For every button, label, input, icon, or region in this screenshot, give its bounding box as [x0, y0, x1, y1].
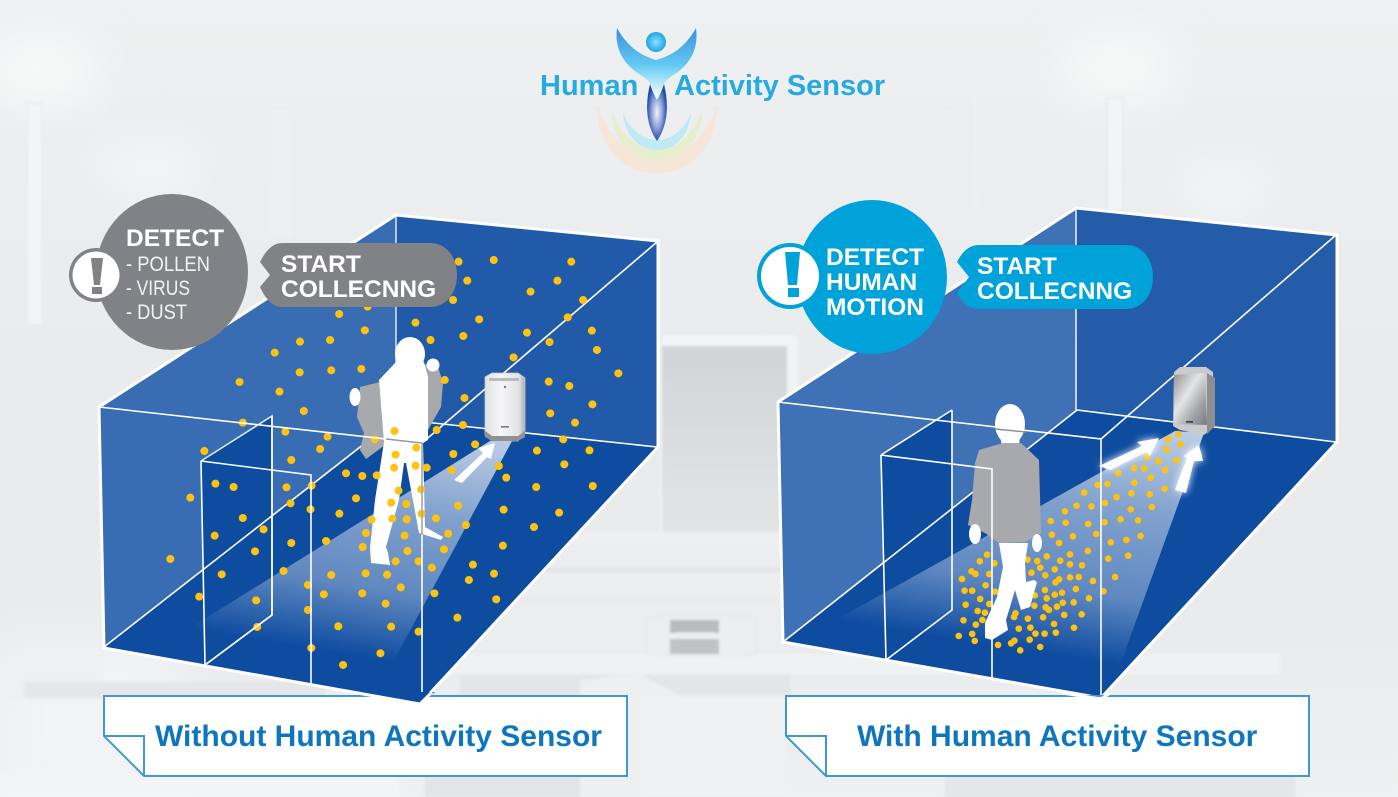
callout: detect pollen, virus, dust: - DUST: [126, 301, 187, 324]
callout: detect pollen, virus, dust: [69, 194, 248, 350]
left door-side panel edges: [201, 416, 272, 665]
icon: air purifier, white: [485, 373, 525, 441]
logo swooshes: [597, 103, 717, 173]
callout: detect human motion: [757, 200, 947, 354]
left back edges: [104, 216, 657, 647]
room: with sensor: [778, 208, 1337, 698]
yellow dust particles, without sensor: lower room: [170, 404, 593, 665]
banner: with human activity sensor: With Human Activity Sensor: [857, 720, 1258, 753]
callout: detect human motion: HUMAN: [826, 269, 917, 296]
person: walking figure with grey bag: [350, 337, 443, 565]
callout: start collecting, blue: COLLECNNG: [977, 278, 1132, 305]
callout: start collecting, grey: COLLECNNG: [281, 276, 436, 303]
callout: start collecting, blue: START: [977, 253, 1057, 280]
callout: detect pollen, virus, dust: - POLLEN: [126, 253, 210, 276]
callout: start collecting, grey: [260, 243, 457, 307]
banner: without human activity sensor: [104, 691, 627, 776]
arrow: air flow towards purifier: [454, 443, 495, 483]
logo text: Human: [540, 70, 638, 102]
callout: detect human motion: MOTION: [826, 294, 924, 321]
right room front frame lines: [778, 208, 1337, 698]
icon: exclamation, grey: [69, 248, 123, 302]
callout: start collecting, grey: START: [281, 251, 361, 278]
stereo on the console: [647, 616, 755, 655]
yellow particles concentrated around walking person: [959, 434, 1181, 650]
callout: detect pollen, virus, dust: - VIRUS: [126, 277, 190, 300]
banner: without human activity sensor: Without Human Activity Sensor: [155, 720, 602, 753]
right room walls and floor: [778, 208, 1336, 698]
callout: detect human motion: DETECT: [826, 244, 924, 271]
logo: Human Activity Sensor: [540, 28, 885, 173]
left room walls and floor: [99, 216, 657, 703]
banner: with human activity sensor: [786, 693, 1309, 776]
right back edges: [783, 208, 1336, 642]
yellow dust particles, without sensor: upper room: [240, 260, 618, 398]
arrows: air flow towards purifier: [1099, 438, 1203, 493]
person: walking figure in grey jacket: [968, 404, 1042, 640]
left room front frame lines: [99, 215, 658, 704]
icon: exclamation, blue: [757, 243, 823, 309]
callout: detect pollen, virus, dust: DETECT: [126, 225, 224, 252]
callout: start collecting, blue: [957, 245, 1153, 309]
icon: air purifier, silver: [1173, 367, 1215, 435]
light beam towards purifier, with sensor: [832, 431, 1204, 668]
light beam towards purifier, without sensor: [182, 441, 512, 668]
logo text: Activity Sensor: [674, 70, 885, 102]
room: without sensor: [99, 215, 658, 704]
logo figure: [617, 28, 696, 141]
